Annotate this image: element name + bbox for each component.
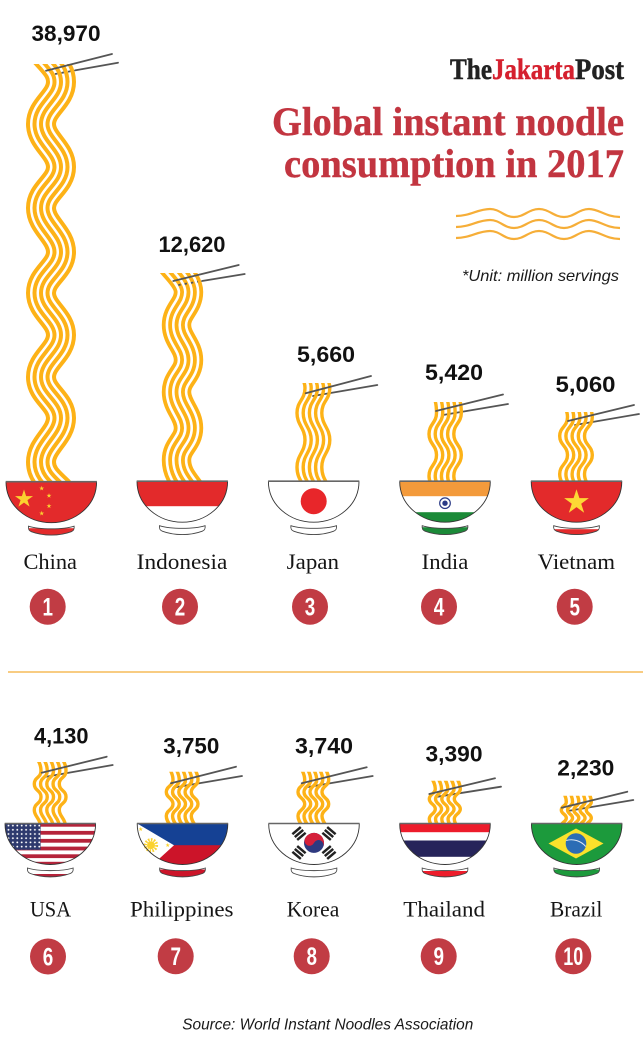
bowl: Brazil flag: [531, 824, 622, 880]
title: consumption in 2017: [284, 141, 624, 186]
noodles and chopsticks: Japan: [297, 376, 377, 490]
label: Korea: Korea: [287, 897, 340, 922]
noodles and chopsticks: Korea: [298, 765, 373, 830]
title: Global instant noodle: [272, 99, 624, 144]
rank badge 4: [421, 589, 457, 625]
logo: The Jakarta Post: Jakarta: [492, 53, 575, 86]
value: Philippines: 3,750: [163, 733, 219, 758]
rank badge 6: [30, 938, 66, 974]
unit note: *Unit: million servings: [462, 268, 619, 285]
panel: USA: [4, 723, 113, 974]
rank badge 9: 9: [433, 943, 444, 971]
label: India: India: [422, 549, 469, 574]
noodles and chopsticks: Philippines: [166, 765, 242, 830]
bowl: Philippines flag: [136, 824, 228, 880]
panel: Korea: [268, 733, 373, 974]
panel: Indonesia: [136, 232, 245, 625]
label: Indonesia: Indonesia: [137, 549, 228, 574]
panel: Japan: [268, 342, 377, 625]
label: Thailand: Thailand: [403, 897, 485, 922]
bowl: Vietnam flag: [531, 481, 622, 537]
rank badge 9: [421, 938, 457, 974]
value: USA: 4,130: [34, 723, 88, 748]
noodles and chopsticks: Brazil: [560, 790, 634, 823]
bowl: China flag: [6, 482, 97, 537]
rank badge 4: 4: [434, 594, 444, 622]
bowl: Korea flag: [268, 824, 360, 877]
rank badge 3: 3: [305, 594, 315, 622]
bowl: USA flag: [4, 824, 96, 879]
panel: Vietnam: [531, 372, 639, 625]
value: China: 38,970: [32, 21, 100, 46]
value: Japan: 5,660: [297, 342, 355, 367]
value: Thailand: 3,390: [426, 742, 482, 767]
noodles and chopsticks: India: [429, 394, 508, 490]
rank badge 2: [162, 589, 198, 625]
bowl: Japan flag: [268, 481, 359, 535]
value: Indonesia: 12,620: [158, 232, 226, 257]
rank badge 5: [557, 589, 593, 625]
title: [272, 99, 624, 186]
label: USA: USA: [30, 897, 71, 922]
noodles and chopsticks: Vietnam: [560, 405, 639, 490]
rank badge 1: 1: [42, 594, 53, 622]
panel: Thailand: [399, 742, 501, 974]
bowl: Indonesia flag: [136, 481, 228, 535]
panel: India: [399, 360, 508, 625]
logo: The Jakarta Post: The: [450, 53, 492, 86]
rank badge 7: 7: [170, 943, 181, 971]
value: India: 5,420: [425, 360, 483, 385]
value: Brazil: 2,230: [557, 756, 614, 781]
source note: Source: World Instant Noodles Association: [182, 1016, 473, 1033]
value: Vietnam: 5,060: [556, 372, 616, 397]
label: Vietnam: Vietnam: [538, 549, 615, 574]
bowl: India flag: [399, 481, 491, 537]
label: China: China: [24, 549, 77, 574]
noodles and chopsticks: China: [32, 40, 118, 506]
rank badge 6: 6: [43, 943, 53, 971]
rank badge 10: [555, 938, 591, 974]
logo: The Jakarta Post: Post: [575, 53, 624, 86]
label: Brazil: Brazil: [550, 897, 602, 922]
rank badge 5: 5: [569, 594, 580, 622]
label: Japan: Japan: [287, 549, 339, 574]
rank badge 2: 2: [175, 594, 185, 622]
rank badge 3: [292, 589, 328, 625]
panel: Brazil: [531, 756, 633, 974]
rank badge 8: 8: [306, 943, 317, 971]
bowl: Thailand flag: [399, 824, 491, 879]
noodles and chopsticks: Thailand: [428, 777, 502, 823]
rank badge 8: [294, 938, 330, 974]
panel: Philippines: [130, 733, 242, 974]
logo: The Jakarta Post: [450, 53, 624, 86]
panel: China: [6, 21, 118, 625]
rank badge 10: 10: [563, 943, 583, 971]
noodles and chopsticks: USA: [34, 756, 113, 830]
value: Korea: 3,740: [295, 733, 353, 758]
noodles and chopsticks: Indonesia: [160, 264, 246, 480]
rank badge 7: [158, 938, 194, 974]
rank badge 1: [30, 589, 66, 625]
icon: decorative noodle waves: [456, 209, 620, 239]
label: Philippines: Philippines: [130, 897, 234, 922]
